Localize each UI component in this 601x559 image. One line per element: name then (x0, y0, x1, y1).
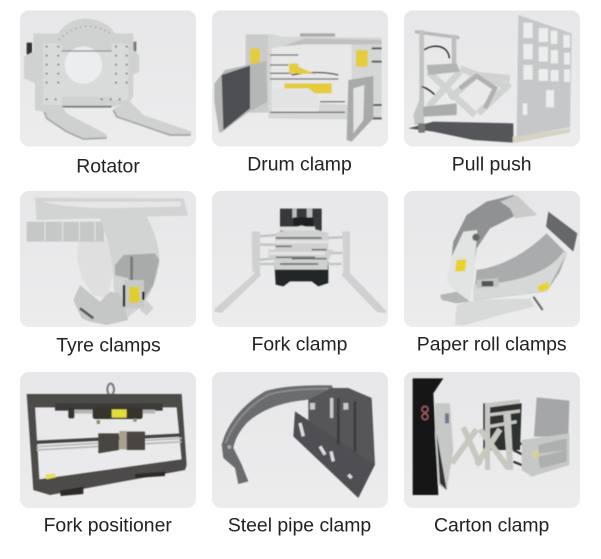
label: Paper roll clamps: Paper roll clamps (417, 334, 567, 356)
icon: carton clamp attachment (413, 378, 569, 495)
icon: fork positioner attachment (27, 384, 187, 496)
panel: Fork clamp (212, 191, 388, 356)
panel: Drum clamp (212, 10, 388, 175)
icon: rotator attachment (24, 18, 192, 139)
icon: pull push attachment (408, 15, 572, 143)
label: Steel pipe clamp: Steel pipe clamp (228, 515, 371, 537)
panel: Fork positioner (20, 372, 196, 537)
label: Tyre clamps: Tyre clamps (56, 335, 161, 357)
panel: Tyre clamps (20, 191, 196, 357)
icon: tyre clamp attachment (27, 198, 188, 325)
label: Fork positioner: Fork positioner (44, 515, 172, 537)
label: Drum clamp: Drum clamp (247, 153, 352, 175)
icon: paper roll clamp attachment (440, 195, 577, 326)
panel: Carton clamp (404, 372, 580, 537)
panel: Steel pipe clamp (212, 372, 388, 537)
panel: Rotator (20, 10, 196, 178)
icon: fork clamp attachment (214, 209, 387, 313)
panel: Pull push (404, 10, 580, 176)
icon: steel pipe clamp attachment (222, 385, 375, 498)
label: Fork clamp: Fork clamp (252, 334, 347, 356)
label: Rotator: Rotator (76, 156, 140, 178)
icon: drum clamp attachment (214, 33, 382, 142)
label: Pull push: Pull push (452, 154, 532, 176)
panel: Paper roll clamps (404, 191, 580, 356)
label: Carton clamp: Carton clamp (434, 515, 549, 537)
